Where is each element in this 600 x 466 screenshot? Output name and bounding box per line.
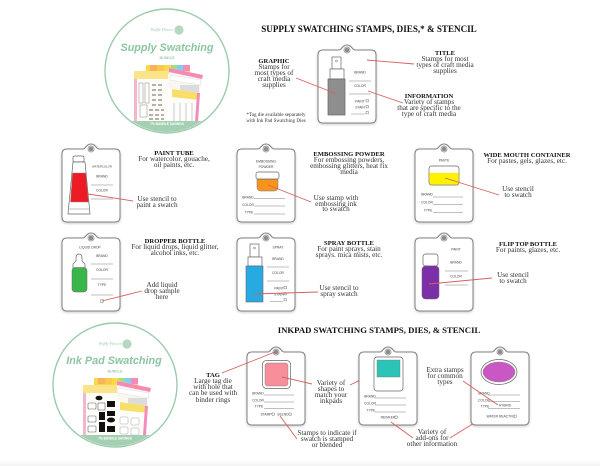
badge: supply swatching bundle — [100, 9, 230, 133]
note — [497, 271, 529, 285]
callout: tag: binder rings — [196, 396, 230, 404]
tag fields: WATER REACTIVE — [487, 414, 516, 418]
tag fields: COLOR — [364, 402, 376, 406]
tag fields — [364, 394, 406, 420]
badge: ink pad swatching bundle — [50, 323, 180, 447]
tag fields — [349, 70, 371, 114]
tag fields: PAINT — [451, 248, 461, 252]
tag fields: HYBRID — [499, 404, 512, 408]
panel: ink tag square — [247, 347, 305, 425]
callout: graphic: craft media — [258, 75, 291, 83]
callout: shapes: match your — [315, 391, 348, 399]
tag fields: COLOR — [96, 188, 108, 192]
bundle savings text: 7% BUNDLE SAVINGS — [150, 122, 184, 126]
tag fields: POWDER — [259, 165, 274, 169]
note: Use stencil to — [319, 284, 359, 292]
note: Use stencil — [502, 185, 534, 193]
footnote — [246, 112, 306, 124]
tag fields — [242, 160, 285, 214]
description: EMBOSSING POWDER — [313, 151, 385, 158]
callout: title: Stamps for most — [421, 55, 469, 63]
arrow — [429, 278, 492, 284]
tag fields — [267, 246, 289, 302]
tag fields: BRAND — [96, 174, 108, 178]
callout: graphic: GRAPHIC — [258, 58, 290, 65]
note: to swatch — [499, 277, 527, 285]
description — [310, 151, 388, 176]
tag fields — [79, 246, 113, 303]
callout: stamped or blended: swatch is stamped — [301, 435, 354, 443]
note: embossing ink — [315, 200, 357, 208]
tag fields: COLOR — [354, 84, 366, 88]
callout: tag: with hole that — [193, 383, 233, 391]
note — [319, 284, 359, 298]
bundle label: BUNDLE — [160, 56, 175, 60]
callout: add-ons: other information — [407, 440, 458, 448]
callout: extra stamps: types — [437, 378, 453, 386]
callout: tag: Large tag die — [194, 377, 232, 385]
tag fields: PAINT — [274, 286, 284, 290]
tag fields: REINKER — [381, 416, 396, 420]
description: sprays. mica mists, etc. — [316, 251, 383, 259]
tag fields: BRAND — [242, 196, 254, 200]
tag fields: LIQUID DROP — [79, 246, 102, 250]
tag fields: BRAND — [450, 260, 462, 264]
callout: extra stamps — [426, 366, 498, 405]
panel: ink tag teal — [359, 347, 417, 425]
arrow — [254, 292, 318, 294]
description: media — [340, 168, 359, 176]
tag fields — [252, 392, 294, 416]
bundle title: Ink Pad Swatching — [66, 355, 162, 367]
tag fields: BRAND — [96, 254, 108, 258]
note: Use stamp with — [314, 194, 359, 202]
note — [136, 195, 178, 209]
description — [138, 150, 210, 169]
arrow — [268, 185, 311, 202]
bundle label: BUNDLE — [108, 370, 123, 374]
tag fields: BLEND — [278, 412, 289, 416]
callout: information: that are specific to the — [397, 104, 461, 112]
tag fields: BRAND — [354, 70, 366, 74]
callout: shapes: shapes to — [318, 385, 345, 393]
note: paint a swatch — [136, 201, 178, 209]
tag fields: BRAND — [478, 392, 490, 396]
icon: pink swatch — [262, 360, 290, 388]
bundle product photo — [132, 65, 203, 132]
description: For watercolor, gouache, — [138, 155, 210, 163]
description: For embossing powders, — [314, 156, 384, 164]
bundle logo: Waffle Flower — [151, 27, 174, 32]
description — [483, 152, 571, 165]
callout: tag: can be used with — [189, 389, 237, 397]
icon: grey spray bottle — [328, 57, 345, 115]
arrow — [102, 291, 142, 301]
callout: information: Variety of stamps — [404, 98, 454, 106]
bundle logo: Waffle Flower — [99, 341, 122, 346]
tag fields: COLOR — [242, 203, 254, 207]
tag fields: COLOR — [421, 200, 433, 204]
callout: extra stamps: Extra stamps — [426, 366, 464, 374]
tag fields: COLOR — [96, 268, 108, 272]
callout: tag — [189, 352, 275, 404]
tag fields: TYPE — [245, 210, 254, 214]
note: here — [156, 293, 168, 301]
bundle savings text: 7% BUNDLE SAVINGS — [98, 436, 132, 440]
tag fields — [421, 158, 463, 212]
tag fields: STAMP — [260, 412, 272, 416]
description: embossing glitters, heat fix — [310, 162, 388, 170]
description: For paints, glazes, etc. — [496, 246, 560, 254]
description: DROPPER BOTTLE — [145, 238, 206, 245]
callout: title: types of craft media — [416, 61, 474, 69]
callout: graphic: most types of — [255, 69, 294, 77]
panel: wide mouth container — [415, 144, 571, 222]
description: For liquid drops, liquid glitter, — [131, 243, 219, 251]
tag fields: TYPE — [98, 283, 107, 287]
tag fields — [478, 392, 520, 418]
panel: embossing powder — [237, 144, 388, 222]
callout: information: INFORMATION — [405, 93, 454, 100]
bundle product photo — [80, 378, 151, 446]
callout: information — [368, 91, 461, 118]
tag fields: SPRAY — [273, 246, 284, 250]
description: For paint sprays, stain — [317, 245, 381, 253]
tag fields: TYPE — [424, 208, 433, 212]
description — [496, 241, 560, 254]
callout: title — [367, 50, 474, 75]
icon: spray bottle — [246, 244, 263, 302]
note — [314, 194, 359, 213]
note — [144, 281, 180, 301]
callout: stamped or blended: or blended — [312, 441, 343, 449]
icon: purple oval swatch — [481, 360, 517, 384]
description: SPRAY BOTTLE — [324, 240, 375, 247]
callout: title: supplies — [433, 67, 457, 75]
tag fields: BRAND — [252, 392, 264, 396]
callout: graphic — [255, 58, 337, 94]
callout: graphic: supplies — [262, 81, 286, 89]
tag fields: BRAND — [421, 192, 433, 196]
tag fields: STAIN — [274, 292, 284, 296]
tag fields: COLOR — [272, 271, 284, 275]
description: PAINT TUBE — [154, 150, 194, 157]
note: Use stencil — [497, 271, 529, 279]
icon: paste jar — [429, 166, 459, 185]
icon: powder jar — [256, 172, 279, 191]
callout: add-ons: add-ons for — [416, 434, 449, 442]
tag fields: BRAND — [364, 394, 376, 398]
note: Add liquid — [147, 281, 178, 289]
tag fields: TYPE — [255, 404, 264, 408]
note — [502, 185, 534, 199]
panel: flip top bottle — [415, 233, 560, 311]
description: FLIP TOP BOTTLE — [499, 241, 558, 248]
tag fields: BRAND — [272, 257, 284, 261]
description: oil paints, etc. — [154, 161, 194, 169]
panel: paint tube — [62, 144, 210, 222]
arrow — [445, 178, 499, 195]
callout: add-ons — [391, 415, 487, 448]
arrow — [88, 194, 133, 201]
callout: title: TITLE — [435, 50, 456, 57]
bundle title: Supply Swatching — [121, 42, 214, 54]
heading: inkpad section: INKPAD SWATCHING STAMPS, DIES, & STENCIL — [278, 325, 480, 335]
tag fields: COLOR — [252, 398, 264, 402]
callout: add-ons: Variety of — [418, 428, 447, 436]
tag fields: COLOR — [450, 274, 462, 278]
callout: extra stamps: for common — [427, 372, 463, 380]
heading: supply section: SUPPLY SWATCHING STAMPS, DIES,* & STENCIL — [261, 24, 477, 34]
callout: shapes: inkpads — [320, 397, 342, 405]
callout: shapes — [282, 372, 377, 405]
tag fields — [445, 248, 468, 285]
tag fields: PASTE — [439, 158, 450, 162]
icon: teal swatch — [374, 357, 403, 391]
footnote: with Ink Pad Swatching Dies — [246, 118, 306, 124]
panel: ink tag oval — [471, 347, 529, 425]
footnote: *Tag die available separately — [246, 112, 306, 118]
note: Use stencil to — [137, 195, 177, 203]
tag fields: PAINT — [355, 100, 365, 104]
tag fields: TYPE — [367, 408, 376, 412]
description: WIDE MOUTH CONTAINER — [483, 152, 571, 159]
note: drop sample — [144, 287, 180, 295]
callout: stamped or blended — [280, 416, 357, 449]
note: spray swatch — [320, 290, 358, 298]
icon: flip top bottle — [422, 254, 439, 299]
tag fields: STAIN — [355, 106, 365, 110]
description: alcohol inks, etc. — [151, 249, 200, 257]
description — [316, 240, 383, 259]
callout: shapes: Variety of — [317, 379, 346, 387]
callout: graphic: Stamps for — [258, 63, 290, 71]
panel: spray bottle — [237, 233, 383, 311]
tag fields: EMBOSSING — [256, 160, 276, 164]
tag: anatomy example — [318, 45, 376, 123]
icon: dropper bottle — [72, 254, 87, 292]
callout: tag: TAG — [206, 372, 220, 379]
note: to swatch — [504, 191, 532, 199]
icon: paint tube — [68, 156, 90, 214]
tag fields: TYPE — [481, 404, 490, 408]
tag fields: COLOR — [478, 398, 490, 402]
description — [131, 238, 219, 257]
callout: information: type of craft media — [402, 110, 457, 118]
tag fields — [91, 164, 113, 199]
panel: dropper bottle — [62, 233, 219, 311]
note: to swatch — [322, 205, 350, 213]
tag fields: WATERCOLOR — [92, 164, 112, 168]
description: For pastes, gels, glazes, etc. — [487, 157, 567, 165]
callout: stamped or blended: Stamps to indicate if — [297, 429, 357, 437]
